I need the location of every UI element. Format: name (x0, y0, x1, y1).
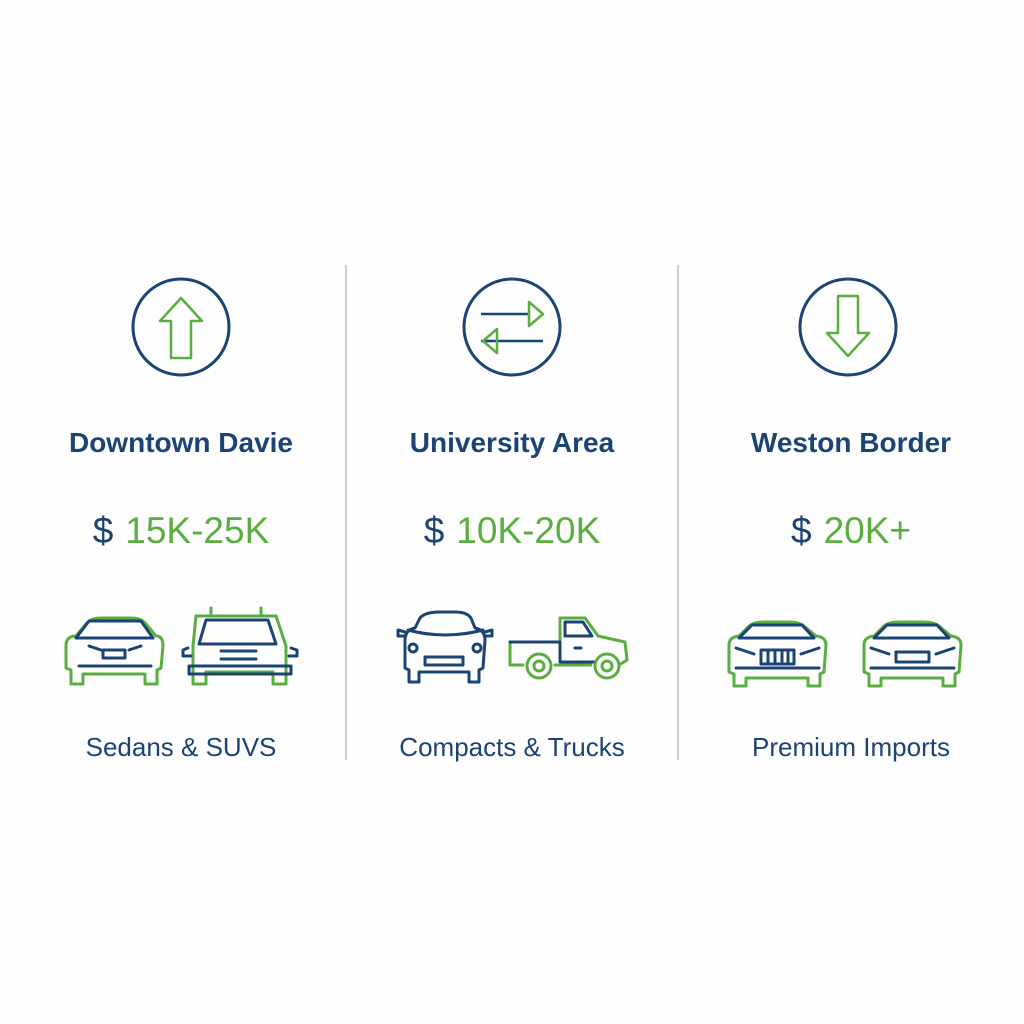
panel: Downtown Davie (64, 278, 298, 762)
icon: compact and truck (396, 610, 628, 684)
icon: up arrow (132, 278, 230, 376)
price: $ 15K-25K (93, 510, 269, 551)
icon: swap arrows (462, 278, 562, 376)
heading: Weston Border (751, 427, 951, 458)
icon: down arrow (798, 278, 898, 376)
heading: Downtown Davie (69, 427, 293, 458)
caption: Sedans & SUVS (86, 732, 276, 762)
caption: Premium Imports (752, 732, 950, 762)
price: $ 20K+ (791, 510, 911, 551)
heading: University Area (410, 427, 614, 458)
icon: premium cars (728, 620, 962, 688)
panel: University Area (396, 278, 628, 762)
price: $ 10K-20K (424, 510, 600, 551)
caption: Compacts & Trucks (399, 732, 625, 762)
icon: cars (64, 606, 298, 686)
panel: Weston Border (728, 278, 962, 762)
